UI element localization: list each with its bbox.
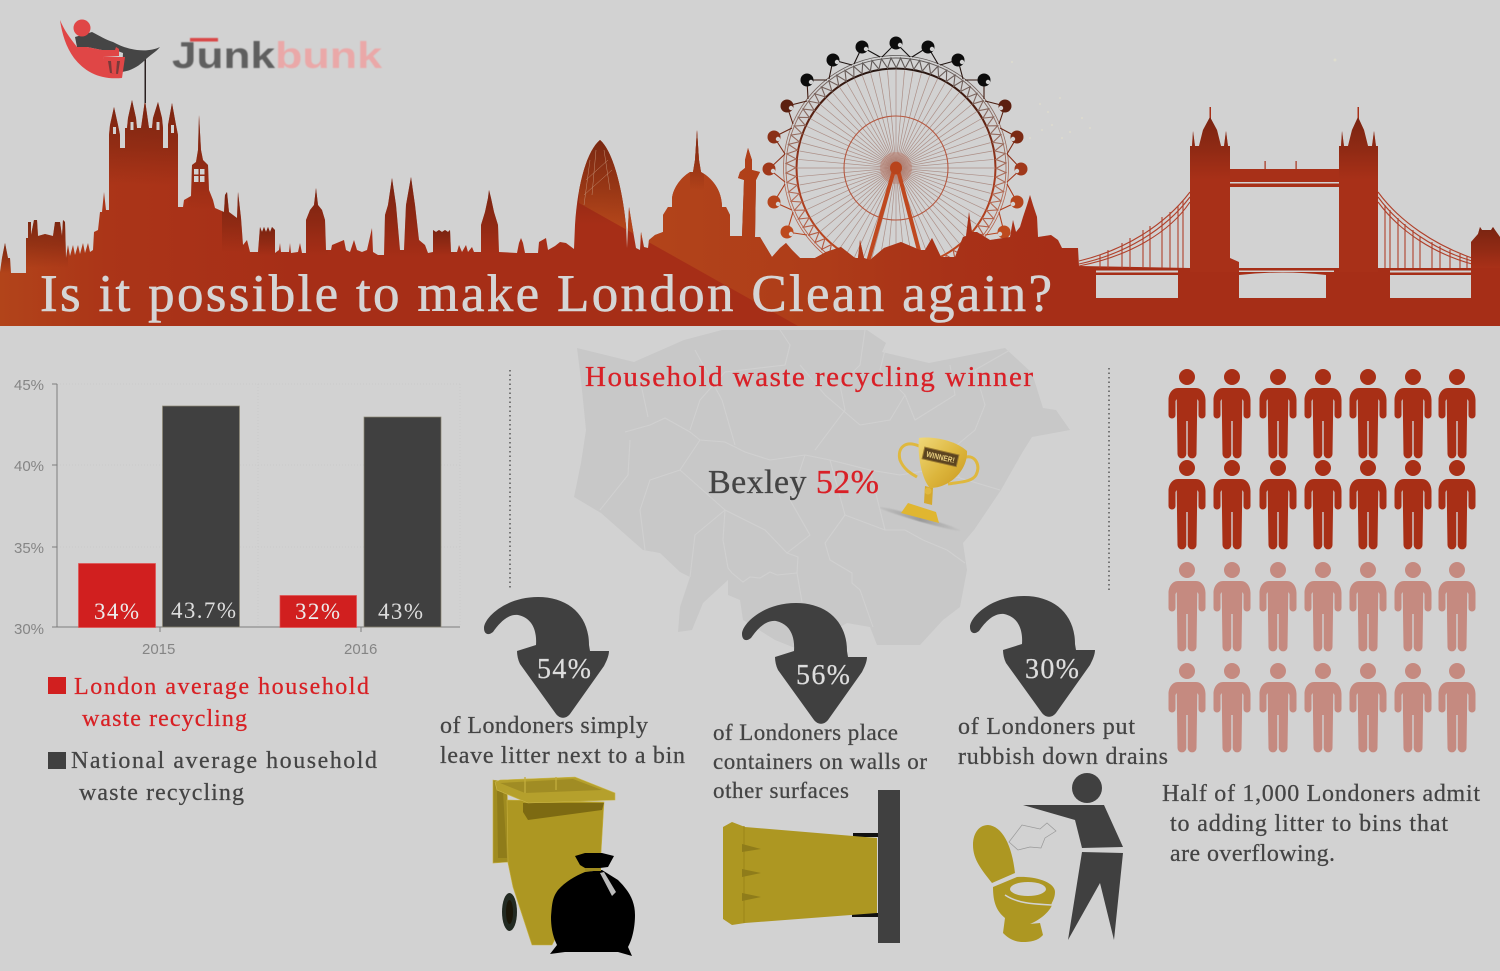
text: half of Londoners: to adding litter to bins that: [1170, 811, 1448, 837]
icon: toilet: [973, 825, 1055, 942]
y-axis labels: [14, 377, 44, 638]
stat: 30% rubbish down drains: [958, 596, 1168, 942]
caption 54%: [440, 713, 685, 769]
arrow 54%: [484, 597, 609, 718]
caption 56%: other surfaces: [713, 778, 849, 803]
figure pictogram: half of 1,000 Londoners: [1168, 369, 1476, 752]
icon: wheelie bin and bag: [493, 777, 635, 956]
y-axis labels: 40%: [14, 458, 44, 475]
bars 2016: 43%: [378, 599, 423, 624]
title: Is it possible to make London Clean again?: [40, 265, 1052, 323]
legend: national: National average household: [71, 748, 377, 774]
winner section dividers: [510, 368, 1109, 590]
trophy plaque: WINNER!: [925, 450, 956, 465]
tower bridge: [1079, 107, 1500, 298]
bars 2015: 43.7%: [171, 598, 236, 623]
arrow 56%: [742, 603, 867, 724]
city silhouette: [0, 100, 1500, 326]
arrow 30%: [970, 596, 1095, 717]
y-axis labels: 45%: [14, 377, 44, 394]
y-axis labels: 30%: [14, 621, 44, 638]
bars 2016: [280, 417, 441, 628]
icon: bin against wall: [723, 790, 900, 943]
x-axis labels: [142, 641, 377, 658]
bar chart: household recycling: [14, 377, 460, 658]
icon: trophy: [879, 438, 978, 533]
logo: Junkbunk: [60, 20, 382, 103]
y-axis labels: 35%: [14, 540, 44, 557]
London map watermark: [574, 330, 1070, 650]
caption 56%: [713, 720, 927, 803]
logo wordmark: [172, 35, 382, 76]
rows of dark figures: [1168, 369, 1476, 549]
faint background speckles: [1011, 58, 1336, 139]
arrow 56%: 56%: [796, 660, 850, 691]
bars 2015: [78, 406, 240, 628]
caption 30%: rubbish down drains: [958, 744, 1168, 770]
x-axis labels: 2016: [344, 641, 377, 658]
chart legend: [48, 674, 377, 806]
caption 30%: of Londoners put: [958, 714, 1135, 740]
london eye: [762, 36, 1028, 260]
legend: london: London average household: [74, 674, 369, 700]
arrow 30%: 30%: [1025, 654, 1079, 685]
text: half of Londoners: [1162, 781, 1480, 867]
bars 2016: 32%: [295, 599, 340, 624]
legend: national: [48, 748, 377, 806]
text: half of Londoners: are overflowing.: [1170, 841, 1335, 867]
logo icon: caped hero with bin: [60, 20, 160, 78]
heading: recycling winner: Household waste recycling winner: [585, 361, 1033, 393]
legend: london: waste recycling: [82, 706, 247, 732]
bag: [550, 853, 635, 956]
caption 54%: leave litter next to a bin: [440, 743, 685, 769]
caption 56%: of Londoners place: [713, 720, 898, 745]
text: half of Londoners: Half of 1,000 Londoners admit: [1162, 781, 1480, 807]
icon: figure dropping litter: [1009, 773, 1123, 940]
winner value: Bexley 52%: [708, 464, 879, 501]
caption 56%: containers on walls or: [713, 749, 927, 774]
legend: london: [48, 674, 369, 732]
x-axis labels: 2015: [142, 641, 175, 658]
rows of light figures: [1168, 562, 1476, 752]
logo wordmark: bunk: [275, 35, 382, 76]
caption 54%: of Londoners simply: [440, 713, 648, 739]
logo flag pole: [144, 57, 146, 103]
caption 30%: [958, 714, 1168, 770]
stat: 56% containers on walls: [713, 603, 927, 943]
stat: 54% litter next to bin: [440, 597, 685, 956]
arrow 54%: 54%: [537, 654, 591, 685]
header skyline: [0, 36, 1500, 326]
legend: national: waste recycling: [79, 780, 244, 806]
bars 2015: 34%: [94, 599, 139, 624]
logo wordmark: Junk: [172, 35, 276, 76]
